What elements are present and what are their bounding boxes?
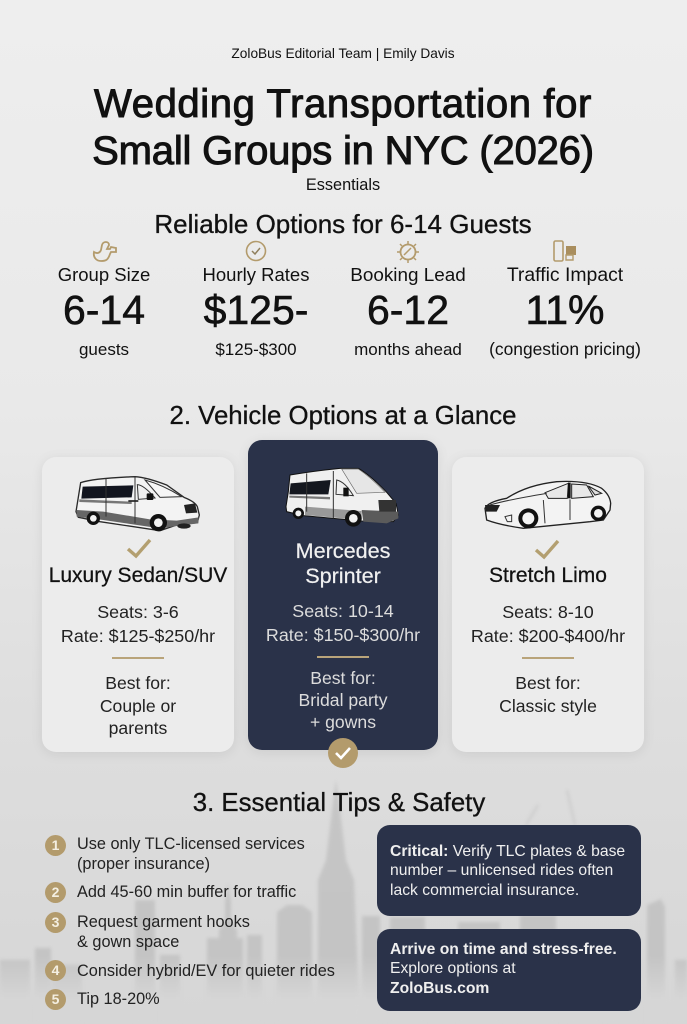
callout: critical (377, 825, 641, 916)
label: traffic impact: Traffic Impact (507, 264, 623, 286)
best for: Best for: (310, 668, 376, 688)
section heading: reliable options: Reliable Options for 6-14 Guests (154, 209, 532, 239)
tip 5 (45, 989, 160, 1010)
icon: traffic impact (553, 240, 576, 262)
tip 2: Add 45-60 min buffer for traffic (77, 883, 296, 901)
icon: booking lead (397, 241, 419, 263)
vehicle details: Rate: $150-$300/hr (266, 625, 420, 645)
tip 4: Consider hybrid/EV for quieter rides (77, 962, 335, 980)
vehicle details (471, 602, 625, 646)
panel: mercedes sprinter (248, 440, 438, 750)
tip 3: 3 (52, 914, 59, 930)
subtitle: Essentials (306, 176, 380, 194)
badge: recommended check (328, 738, 358, 768)
tips list (45, 835, 335, 1010)
tip 1: 1 (52, 837, 59, 853)
panel: luxury sedan/SUV (42, 457, 234, 752)
stat: group size (58, 241, 150, 359)
divider (112, 657, 164, 659)
stat: traffic impact (489, 240, 641, 359)
tip 3: & gown space (77, 933, 179, 951)
best for (100, 673, 176, 738)
stat: booking lead (350, 241, 466, 359)
value: traffic impact: 11% (525, 287, 605, 333)
best for (499, 673, 597, 716)
vehicle details (266, 601, 420, 645)
stat: hourly rates (203, 240, 309, 359)
vehicle details (61, 602, 215, 646)
panel: stretch limo (452, 457, 644, 752)
title (92, 82, 594, 173)
title: Small Groups in NYC (2026) (92, 129, 594, 173)
section heading: essential tips: 3. Essential Tips & Safety (193, 789, 485, 817)
icon: hourly rates (246, 240, 266, 262)
tip 1: Use only TLC-licensed services (77, 835, 305, 853)
label: group size: Group Size (58, 264, 150, 285)
vehicle name: Mercedes (296, 538, 390, 563)
callout: critical: lack commercial insurance. (390, 882, 579, 899)
callout: call to action: Arrive on time and stress-free. (390, 941, 617, 958)
best for: + gowns (310, 712, 376, 732)
icon: car (484, 480, 612, 529)
icon: van (286, 468, 399, 527)
vehicle details: Seats: 10-14 (292, 601, 394, 621)
best for: Best for: (105, 673, 171, 693)
icon: check (535, 540, 560, 560)
vehicle name (296, 538, 390, 588)
best for: Bridal party (299, 690, 387, 710)
callout: critical: number – unlicensed rides often (390, 862, 613, 879)
divider (317, 656, 369, 658)
vehicle name: Stretch Limo (489, 564, 607, 587)
tip 1: (proper insurance) (77, 855, 210, 873)
best for: parents (109, 718, 167, 738)
callout: call to action (377, 929, 641, 1011)
value: booking lead: 6-12 (367, 287, 449, 333)
icon: van (75, 476, 200, 532)
vehicle details: Rate: $200-$400/hr (471, 626, 625, 646)
icon: check (127, 539, 152, 558)
callout: call to action: Explore options at (390, 960, 516, 977)
tip 2: 2 (52, 884, 59, 900)
tip 3 (45, 912, 250, 951)
note: booking lead: months ahead (354, 340, 462, 359)
callout: call to action: ZoloBus.com (390, 980, 489, 997)
note: traffic impact: (congestion pricing) (489, 339, 641, 359)
vehicle details: Seats: 3-6 (97, 602, 179, 622)
label: booking lead: Booking Lead (350, 265, 466, 286)
section heading: vehicle options: 2. Vehicle Options at a Glance (169, 402, 517, 430)
title: Wedding Transportation for (94, 82, 592, 126)
tip 5: Tip 18-20% (77, 990, 160, 1008)
callout: critical: Critical: Verify TLC plates & base (390, 843, 625, 860)
icon: group size (92, 241, 117, 262)
label: hourly rates: Hourly Rates (203, 264, 309, 285)
note: group size: guests (79, 340, 129, 359)
best for: Classic style (499, 696, 597, 716)
best for: Best for: (515, 673, 581, 693)
tip 4: 4 (52, 962, 59, 978)
divider (522, 657, 574, 659)
tip 3: Request garment hooks (77, 913, 250, 931)
vehicle name: Luxury Sedan/SUV (49, 564, 227, 587)
background skyline (0, 786, 687, 984)
best for: Couple or (100, 696, 176, 716)
byline: ZoloBus Editorial Team | Emily Davis (231, 46, 455, 61)
vehicle details: Rate: $125-$250/hr (61, 626, 215, 646)
note: hourly rates: $125-$300 (215, 340, 297, 359)
best for (299, 668, 388, 732)
vehicle details: Seats: 8-10 (502, 602, 594, 622)
value: group size: 6-14 (63, 287, 145, 333)
vehicle name: Sprinter (305, 563, 381, 588)
tip 1 (45, 835, 305, 873)
value: hourly rates: $125- (204, 287, 308, 333)
tip 5: 5 (52, 991, 59, 1007)
